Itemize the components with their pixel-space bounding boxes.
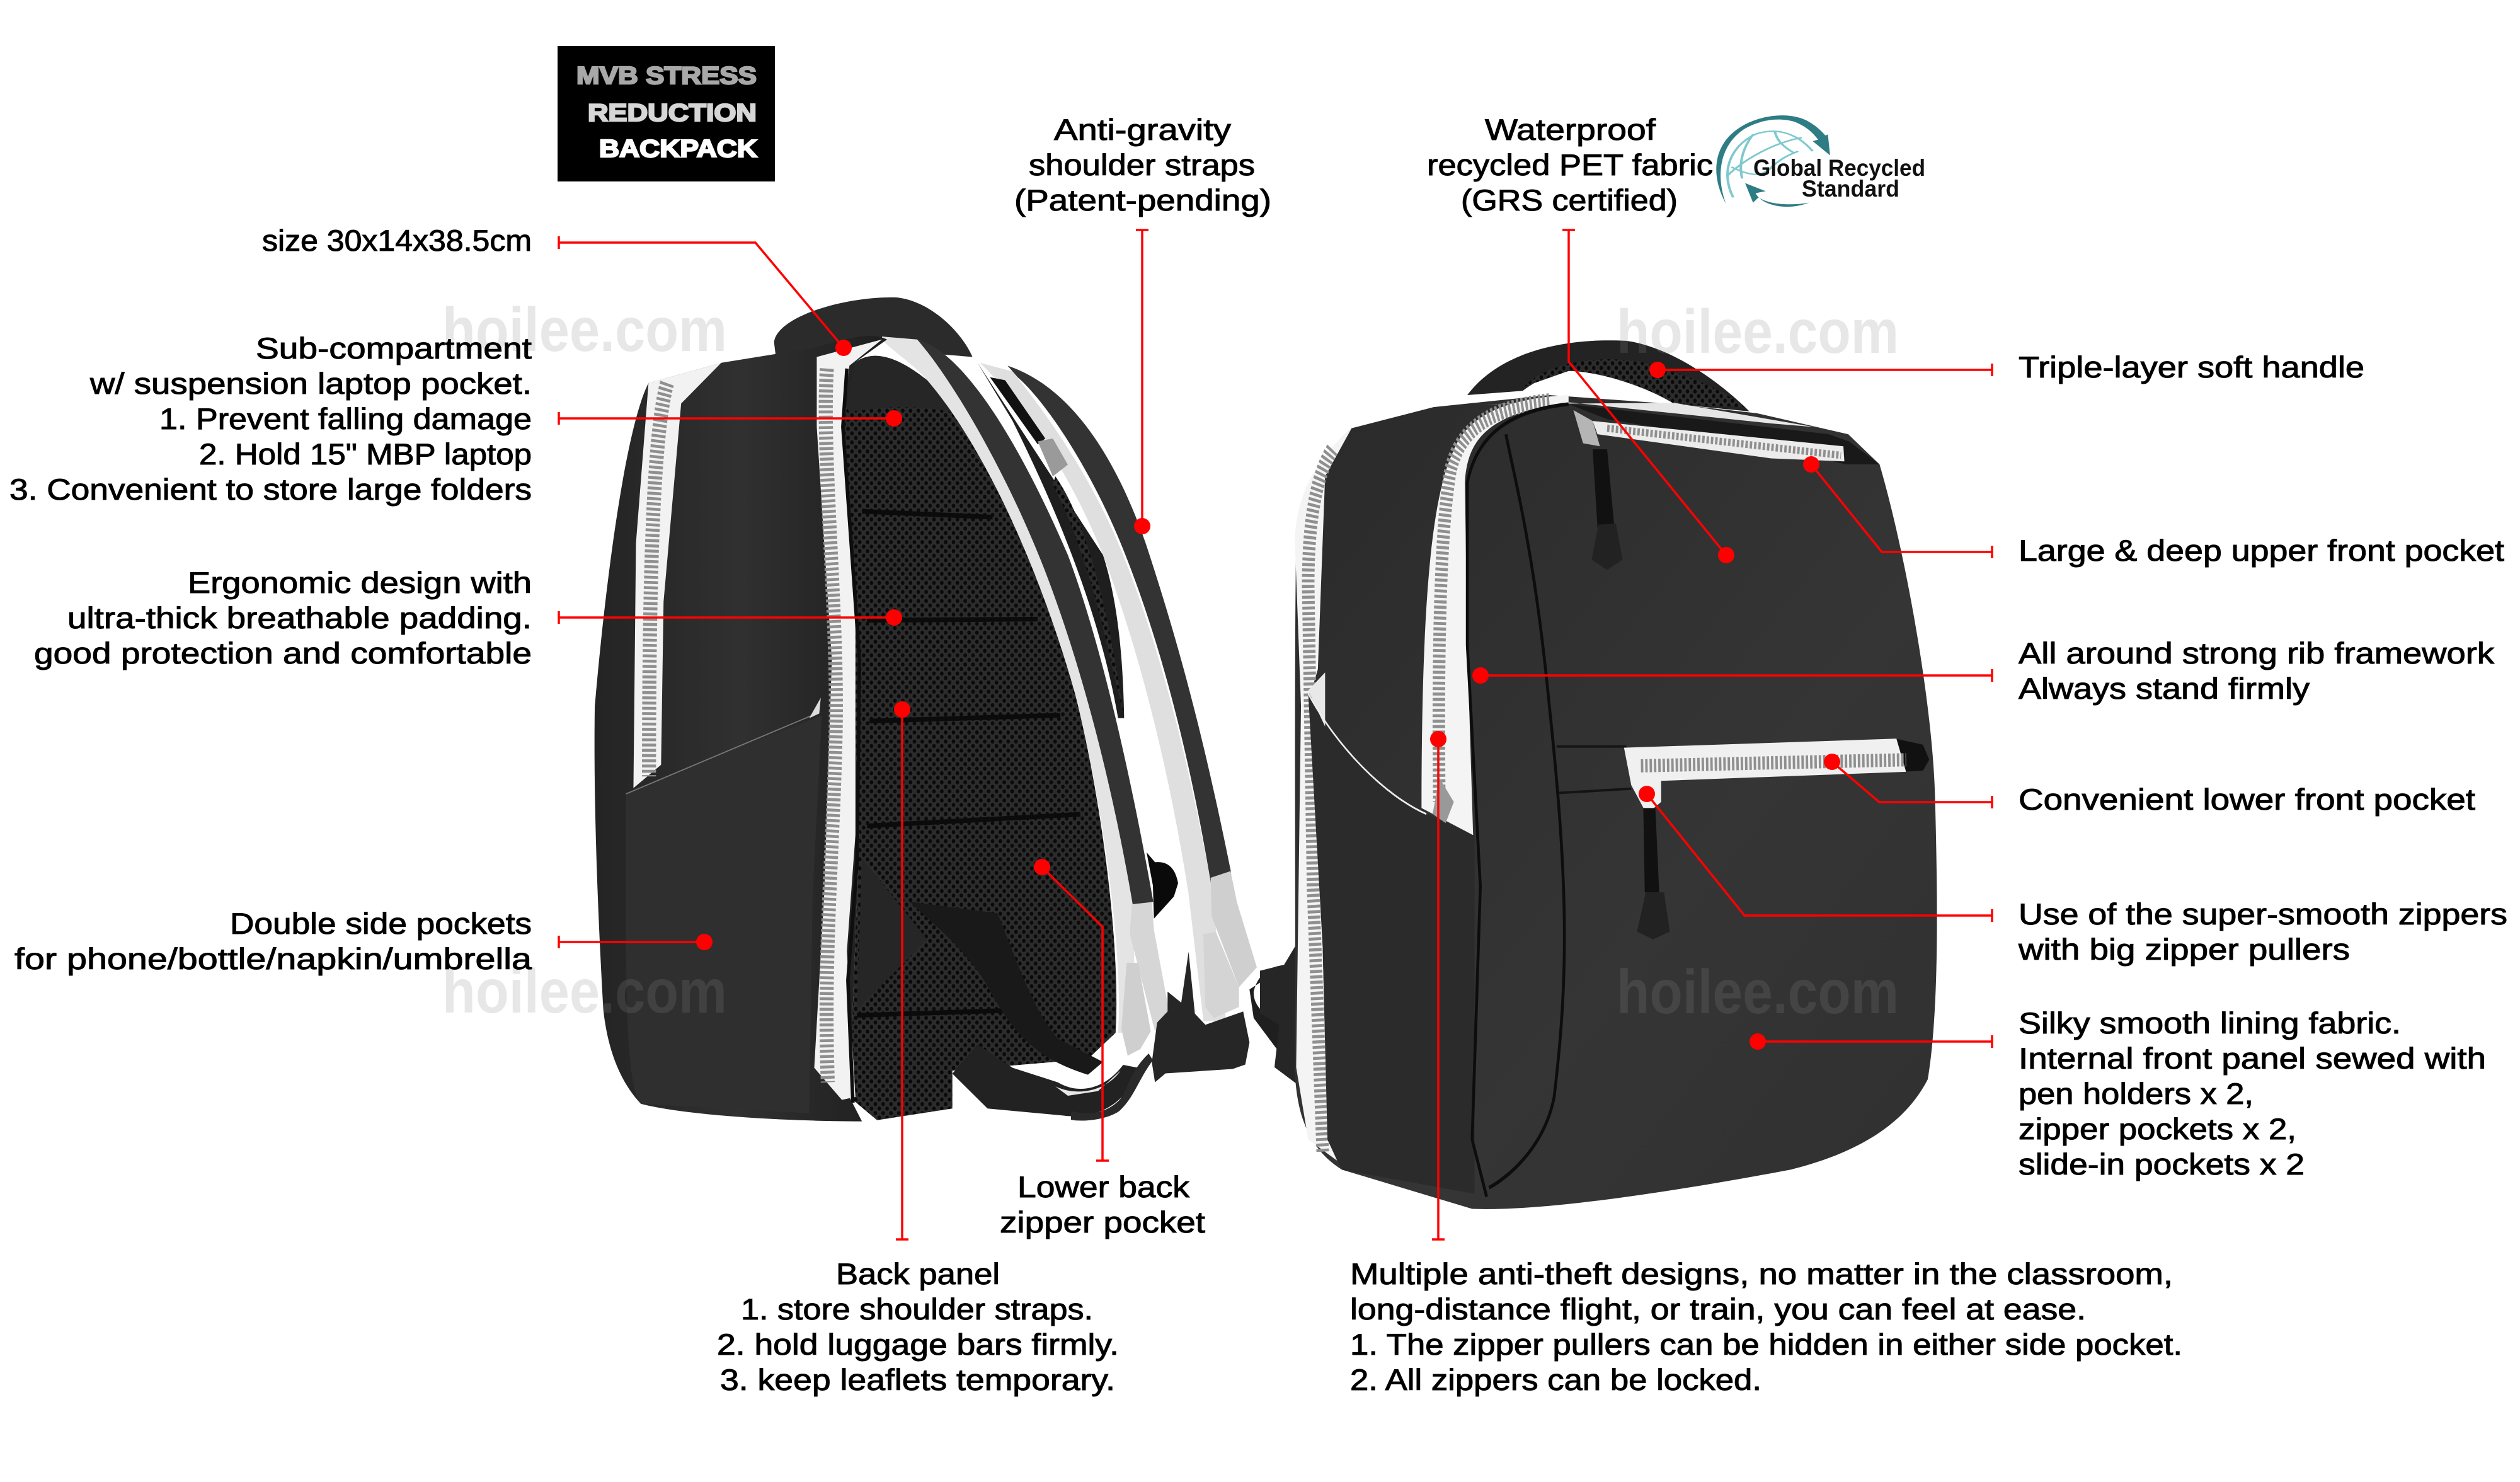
label: back panel — [717, 1257, 1119, 1396]
leader: waterproof — [1562, 230, 1734, 563]
bottom strap loop — [1071, 1054, 1153, 1120]
label: anti-theft: 2. All zippers can be locked. — [1350, 1363, 1761, 1396]
label: shoulder straps: Anti-gravity — [1054, 113, 1232, 146]
icon: global recycled standard logo — [1716, 115, 1925, 207]
backpack: rear and side view — [595, 297, 1231, 1122]
label: lower back pocket — [1000, 1170, 1205, 1239]
label: shoulder straps — [1014, 113, 1271, 217]
left strap stub — [1260, 941, 1298, 1085]
centre zipper — [814, 340, 882, 1103]
lower zipper puller — [1637, 808, 1670, 939]
label: lining fabric — [2019, 1006, 2486, 1181]
leader: anti-theft — [1430, 731, 1446, 1239]
label: shoulder straps: shoulder straps — [1029, 148, 1255, 181]
label: waterproof fabric: Waterproof — [1485, 113, 1656, 146]
label: upper pocket: Large & deep upper front pocket — [2019, 534, 2504, 567]
label: ergonomic design: good protection and comfortable — [34, 636, 532, 670]
label: lining fabric: pen holders x 2, — [2019, 1077, 2254, 1110]
label: lower pocket: Convenient lower front pocket — [2019, 783, 2475, 816]
leader: rib framework — [1472, 667, 1992, 684]
label: anti-theft — [1350, 1257, 2182, 1396]
leader: ergonomic — [559, 609, 902, 626]
label: zippers: Use of the super-smooth zippers — [2019, 897, 2507, 931]
upper zipper puller — [1592, 449, 1623, 570]
label: side pockets — [14, 907, 532, 975]
label: lining fabric: Silky smooth lining fabric. — [2019, 1006, 2401, 1040]
label: ergonomic design — [34, 566, 532, 670]
side pocket — [1309, 672, 1475, 1194]
label: zippers: with big zipper pullers — [2018, 933, 2350, 966]
label: rib framework — [2019, 636, 2495, 705]
leader: zippers — [1639, 786, 1992, 922]
icon: global recycled standard logo: Global Recycled — [1753, 155, 1925, 181]
side zipper — [633, 363, 721, 788]
label: handle: Triple-layer soft handle — [2019, 350, 2364, 384]
label: back panel: 2. hold luggage bars firmly. — [717, 1328, 1119, 1361]
webbing cluster — [1152, 952, 1249, 1083]
far buckle strap — [1211, 871, 1257, 987]
top zipper strip — [1487, 402, 1814, 427]
far shoulder strap — [978, 363, 1231, 1021]
centre zipper — [1421, 395, 1569, 835]
carry handle — [1467, 340, 1750, 411]
label: zippers — [2018, 897, 2507, 966]
leader: lower pocket — [1824, 754, 1992, 808]
lower pads — [1203, 932, 1239, 1018]
leader: side pockets — [559, 934, 713, 950]
watermark top left: hoilee.com — [442, 295, 727, 364]
label: back panel: Back panel — [836, 1257, 1000, 1290]
leader: handle — [1649, 362, 1992, 378]
label: anti-theft: Multiple anti-theft designs, no matter in the classroom, — [1350, 1257, 2173, 1290]
label: back panel: 1. store shoulder straps. — [741, 1292, 1093, 1326]
label: waterproof fabric: recycled PET fabric — [1427, 148, 1713, 181]
lumbar wing — [857, 858, 927, 1009]
label: lining fabric: slide-in pockets x 2 — [2019, 1147, 2305, 1181]
side body of pack — [595, 336, 887, 1122]
label: size: size 30x14x38.5cm — [262, 224, 532, 257]
leader: back panel — [894, 701, 910, 1239]
near buckle strap — [1130, 902, 1169, 1031]
carry handle — [774, 297, 973, 363]
label: waterproof fabric: (GRS certified) — [1461, 183, 1678, 217]
side pocket — [626, 698, 822, 1113]
watermark top right: hoilee.com — [1617, 297, 1899, 366]
label: anti-theft: long-distance flight, or train, you can feel at ease. — [1350, 1292, 2086, 1326]
label: rib framework: Always stand firmly — [2019, 672, 2310, 705]
main body — [1295, 395, 1937, 1209]
leader: upper pocket — [1803, 456, 1992, 558]
label: back panel: 3. keep leaflets temporary. — [720, 1363, 1115, 1396]
leader: size — [559, 236, 852, 356]
label: lower back pocket: zipper pocket — [1000, 1205, 1205, 1239]
title box: REDUCTION — [588, 100, 757, 127]
title box: MVB STRESS — [576, 62, 757, 89]
label: lining fabric: Internal front panel sewed with — [2019, 1042, 2486, 1075]
black side wing — [1147, 853, 1178, 919]
leader: straps — [1134, 230, 1150, 534]
panel seams — [1467, 404, 1569, 1197]
padding grooves — [857, 511, 1080, 1015]
mesh back panel — [843, 356, 1116, 1120]
lower front pocket — [1557, 738, 1929, 814]
label: sub-compartment: Sub-compartment — [256, 331, 532, 365]
upper front pocket — [1569, 404, 1879, 464]
label: sub-compartment: 1. Prevent falling damage — [159, 402, 532, 435]
logo outer arc and arrow — [1716, 115, 1830, 204]
label: ergonomic design: Ergonomic design with — [188, 566, 532, 599]
watermark bottom right: hoilee.com — [1617, 957, 1899, 1026]
title box — [558, 46, 775, 181]
label: waterproof fabric — [1427, 113, 1713, 217]
label: sub-compartment: 2. Hold 15" MBP laptop — [199, 437, 532, 471]
backpack: front three-quarter view — [1260, 340, 1937, 1209]
label: anti-theft: 1. The zipper pullers can be hidden in either side pocket. — [1350, 1328, 2182, 1361]
handle mesh — [1523, 359, 1744, 407]
watermark bottom left: hoilee.com — [442, 956, 727, 1026]
icon: global recycled standard logo: Standard — [1802, 176, 1899, 202]
label: side pockets: Double side pockets — [230, 907, 532, 940]
label: lower back pocket: Lower back — [1017, 1170, 1190, 1203]
waist webbing — [910, 902, 1138, 1117]
label: sub-compartment: w/ suspension laptop pocket. — [89, 367, 532, 400]
loop to right pack — [1249, 965, 1295, 1069]
leader: lining — [1750, 1033, 1992, 1050]
near lower pad — [1121, 963, 1151, 1055]
leader: sub-compartment — [559, 410, 902, 427]
logo globe — [1727, 131, 1813, 197]
label: lining fabric: zipper pockets x 2, — [2019, 1112, 2296, 1146]
logo lower arrow — [1745, 183, 1809, 207]
label: side pockets: for phone/bottle/napkin/umbrella — [14, 942, 532, 975]
outer side zipper — [1295, 428, 1351, 1161]
label: ergonomic design: ultra-thick breathable padding. — [67, 601, 532, 635]
label: sub-compartment: 3. Convenient to store large folders — [9, 473, 532, 506]
strap buckles and webbing — [1071, 853, 1295, 1120]
near shoulder strap — [882, 336, 1154, 1033]
label: rib framework: All around strong rib framework — [2019, 636, 2495, 670]
label: shoulder straps: (Patent-pending) — [1014, 183, 1271, 217]
title box: BACKPACK — [599, 135, 757, 163]
label: sub-compartment — [9, 331, 532, 506]
leader: lower back pocket — [1034, 859, 1109, 1161]
solid fabric top of back panel — [844, 356, 953, 412]
